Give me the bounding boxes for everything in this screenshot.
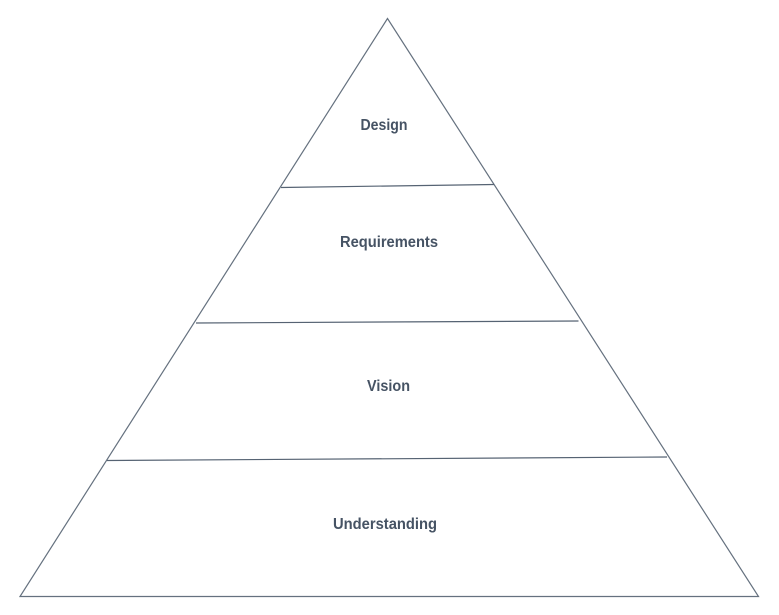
tier divider: design / requirements	[281, 184, 494, 188]
tier divider: requirements / vision	[196, 321, 578, 323]
label: Requirements: Requirements	[340, 234, 438, 251]
label: Design: Design	[360, 117, 408, 134]
tier divider: vision / understanding	[107, 457, 667, 460]
label: Vision: Vision	[367, 378, 410, 395]
label: Understanding: Understanding	[333, 516, 437, 533]
